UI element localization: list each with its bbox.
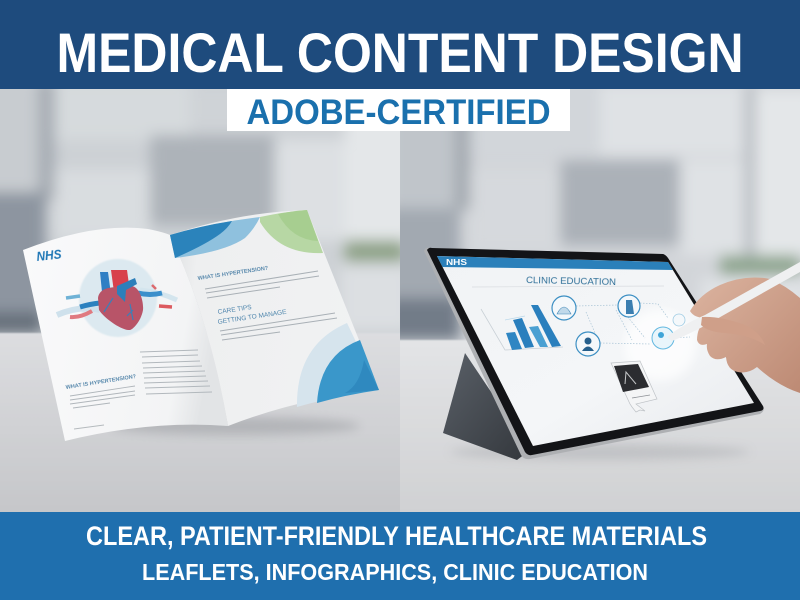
- title banner: [0, 0, 800, 89]
- stylus: [667, 262, 800, 341]
- thumb: [701, 316, 724, 331]
- tablet shadow: [450, 444, 750, 460]
- NHS logo: NHS: [36, 246, 62, 264]
- footer banner: [0, 512, 800, 600]
- right page text: CARE TIPS: [217, 304, 253, 316]
- brochure shadow: [110, 417, 360, 435]
- certification badge: [611, 361, 657, 412]
- tablet body: [424, 248, 764, 459]
- panel: tablet photo: [385, 80, 800, 520]
- screen header bar: [437, 256, 696, 381]
- NHS label: NHS: [446, 258, 468, 267]
- subtitle badge: [227, 89, 570, 132]
- right page: [176, 210, 359, 426]
- left page text: WHAT IS HYPERTENSION?: [65, 374, 137, 391]
- kickstand: [443, 353, 530, 460]
- brochure: [23, 210, 379, 441]
- panel: brochure photo: [0, 80, 415, 523]
- hand and stylus: [667, 262, 800, 393]
- hand: [690, 277, 800, 393]
- network connectors: [576, 303, 690, 344]
- subtitle: ADOBE-CERTIFIED: [246, 93, 550, 132]
- right page text: GETTING TO MANAGE: [217, 309, 288, 326]
- tablet: [424, 248, 764, 460]
- right page text: WHAT IS HYPERTENSION?: [197, 265, 269, 282]
- tablet screen: [437, 256, 754, 446]
- footer line one: CLEAR, PATIENT-FRIENDLY HEALTHCARE MATERIALS: [86, 521, 707, 551]
- right page corner shapes: [170, 210, 379, 407]
- right page text: [197, 265, 337, 340]
- left page: [23, 228, 228, 441]
- heart illustration: [57, 259, 177, 337]
- footer line two: LEAFLETS, INFOGRAPHICS, CLINIC EDUCATION: [142, 559, 648, 585]
- screen title: CLINIC EDUCATION: [526, 275, 616, 288]
- bar chart: [481, 305, 563, 350]
- network icons: [552, 295, 685, 356]
- left page text: [65, 350, 212, 429]
